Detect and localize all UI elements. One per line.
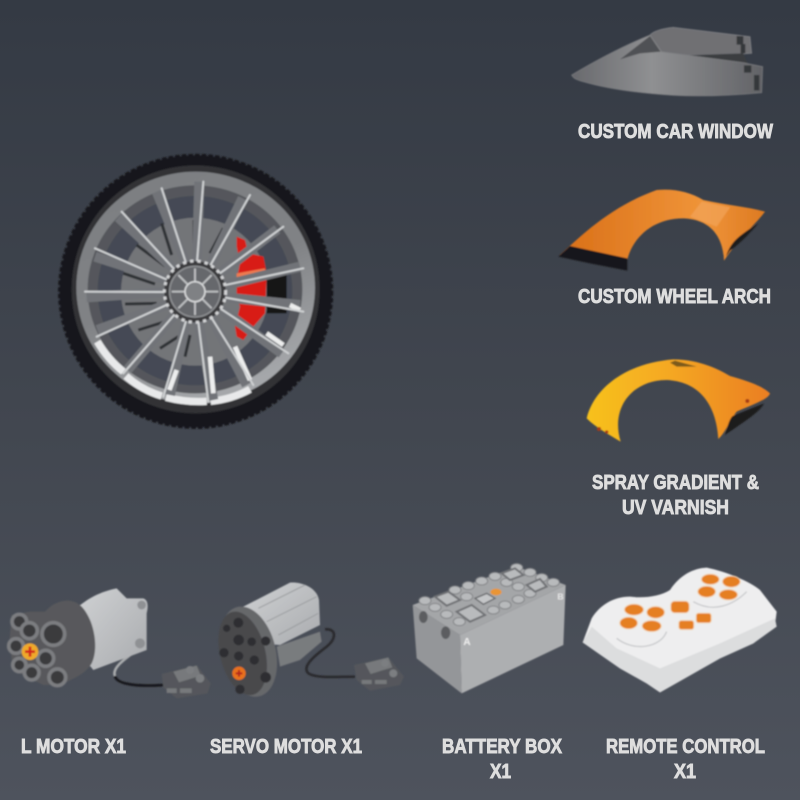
- icon: custom wheel arch: [558, 190, 765, 271]
- label: remote control: REMOTE CONTROL: [606, 736, 765, 758]
- icon: battery box: A: [463, 637, 471, 648]
- label: spray gradient and UV varnish: [592, 472, 759, 519]
- icon: L motor: [9, 588, 211, 698]
- icon: brake disc: [121, 218, 269, 366]
- icon: tire: [60, 155, 332, 427]
- icon: gradient wheel arch: [587, 359, 770, 442]
- label: battery box: X1: [490, 761, 511, 783]
- label: battery box: BATTERY BOX: [442, 736, 563, 758]
- icon: rim ring: [76, 172, 315, 404]
- label: custom car window: CUSTOM CAR WINDOW: [578, 121, 773, 143]
- wheel with chrome rim and red brake caliper: [60, 155, 332, 427]
- label: spray gradient and UV varnish: SPRAY GRADIENT &: [592, 472, 759, 494]
- chart: wheel spokes: [85, 182, 303, 402]
- icon: battery box: [413, 564, 566, 693]
- label: remote control: [606, 736, 765, 783]
- label: custom wheel arch: CUSTOM WHEEL ARCH: [578, 286, 771, 308]
- icon: remote control: [583, 568, 777, 692]
- label: spray gradient and UV varnish: UV VARNISH: [622, 497, 729, 519]
- label: L motor: L MOTOR X1: [21, 736, 126, 758]
- label: remote control: X1: [674, 761, 696, 783]
- icon: hub: [164, 261, 226, 322]
- icon: servo motor: [210, 583, 404, 703]
- icon: battery box: B: [557, 591, 564, 601]
- label: servo motor: SERVO MOTOR X1: [210, 736, 362, 758]
- icon: brake caliper: [235, 237, 287, 340]
- label: battery box: [442, 736, 563, 783]
- icon: custom car window: [572, 27, 763, 96]
